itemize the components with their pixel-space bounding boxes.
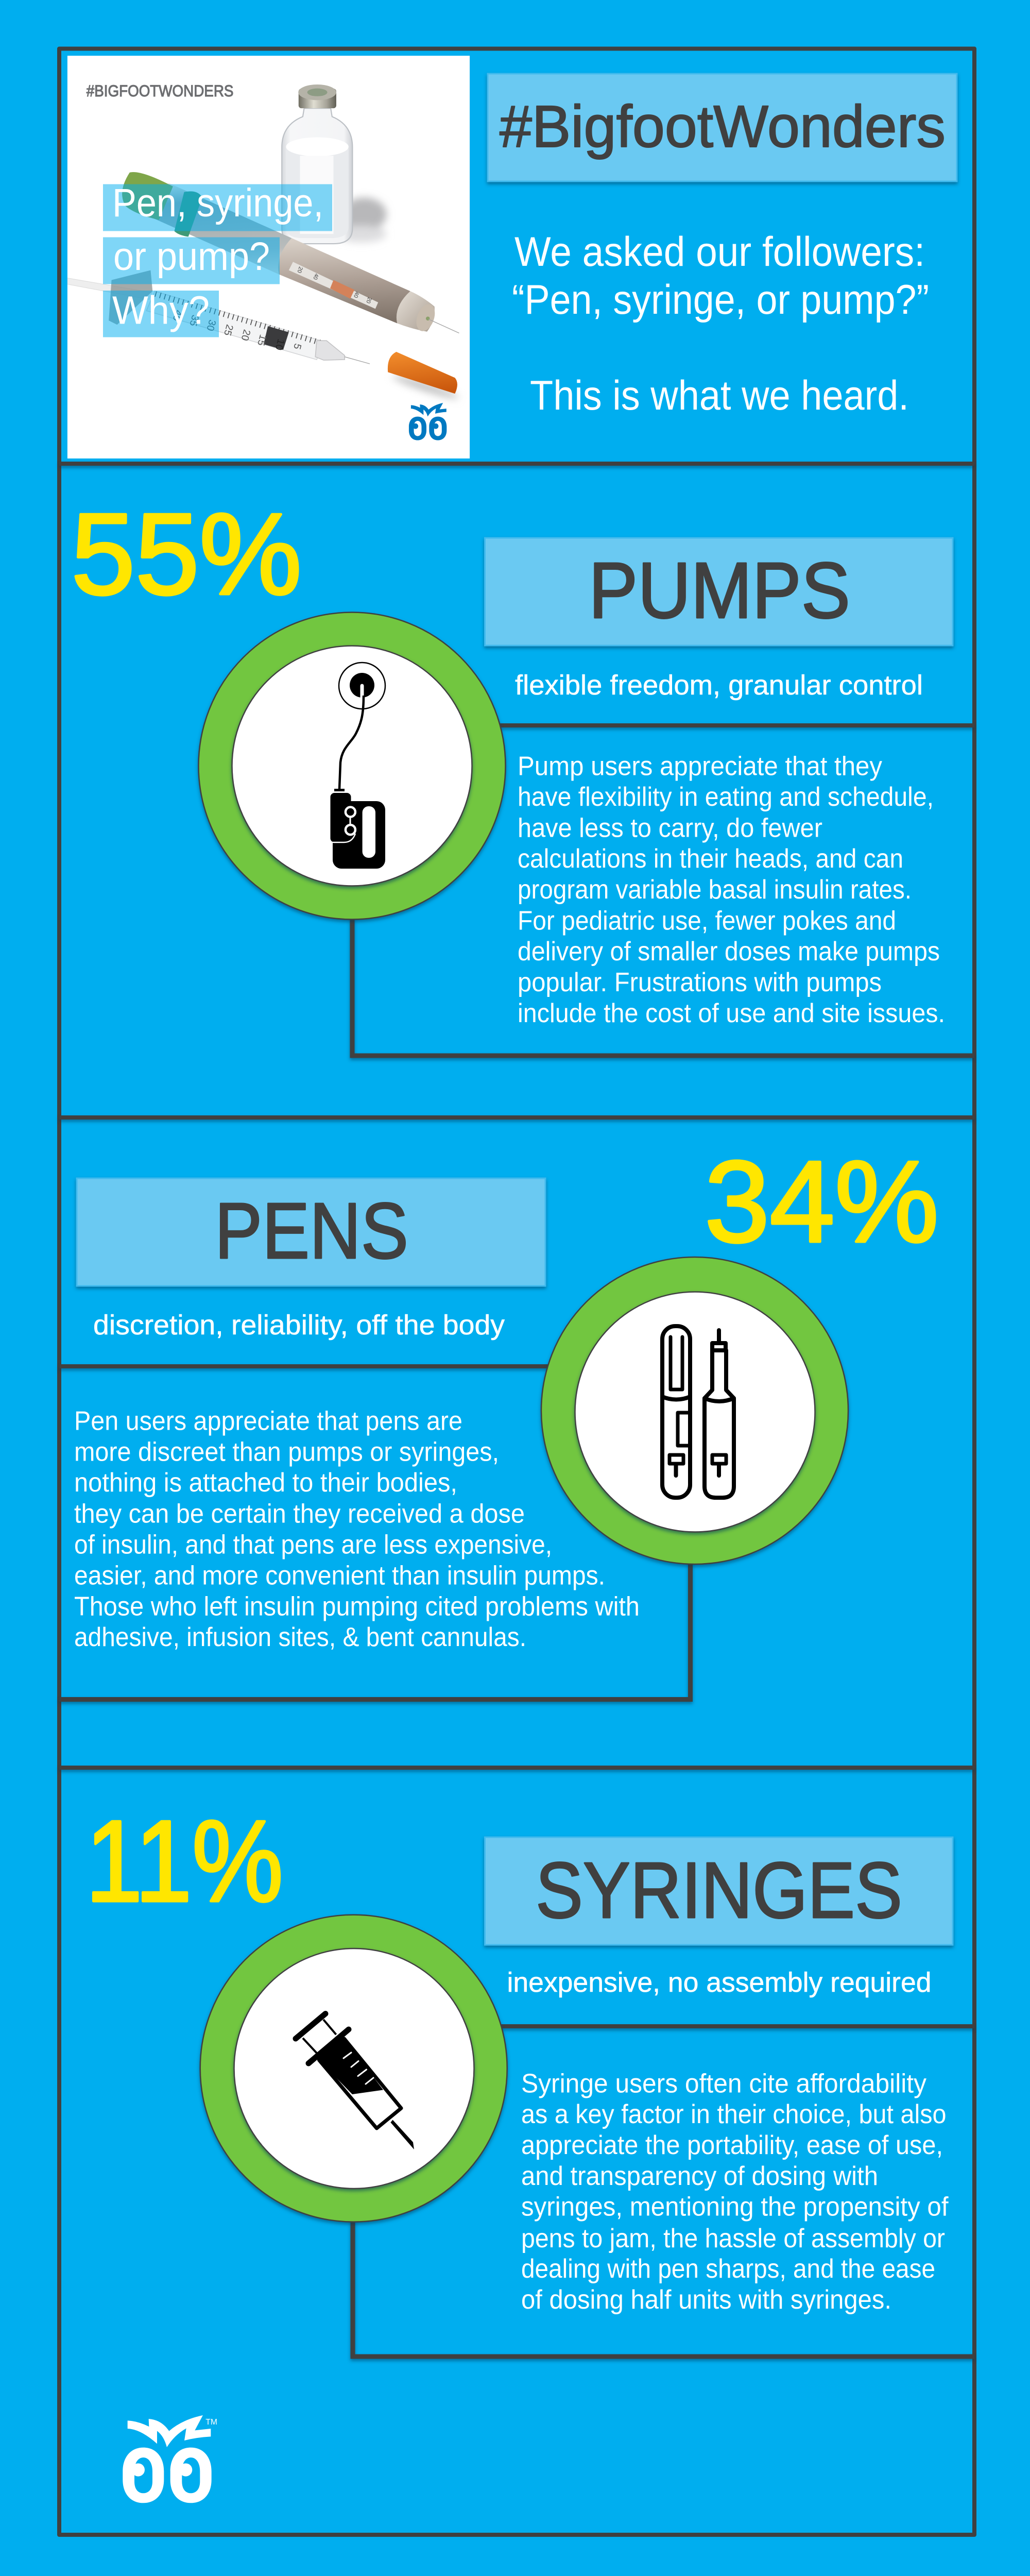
syringe: 30 (204, 318, 218, 332)
pumps paragraph: have flexibility in eating and schedule, (518, 782, 934, 812)
insulin pen (122, 172, 459, 334)
syringes paragraph: pens to jam, the hassle of assembly or (521, 2224, 945, 2253)
panel: pens (59, 1137, 939, 1699)
pens paragraph: Pen users appreciate that pens are (74, 1406, 462, 1436)
pumps paragraph: Pump users appreciate that they (518, 751, 882, 781)
intro text (512, 229, 929, 419)
syringes paragraph: as a key factor in their choice, but also (521, 2099, 947, 2129)
pumps paragraph: delivery of smaller doses make pumps (518, 937, 940, 967)
syringes circle (200, 1915, 507, 2222)
pens paragraph: more discreet than pumps or syringes, (74, 1437, 499, 1467)
pens paragraph: Those who left insulin pumping cited problems with (74, 1592, 640, 1622)
syringes percent: 11% (85, 1796, 283, 1926)
logo: white mark footer: TM (205, 2418, 217, 2427)
insulin pen: 40 (312, 273, 320, 280)
pumps heading box (485, 538, 953, 646)
syringe: 25 (221, 323, 235, 337)
pumps connector lines (352, 723, 974, 1056)
orange needle cap (388, 352, 460, 401)
logo: blue mark on photo (409, 403, 447, 440)
syringes connector lines (353, 2024, 974, 2357)
pens connector lines (59, 1364, 690, 1699)
photo overlay: question (103, 181, 332, 337)
pens paragraph (74, 1406, 640, 1652)
pens heading box (77, 1178, 545, 1286)
pens circle (541, 1257, 848, 1564)
syringe: 20 (239, 328, 252, 342)
photo: insulin devices (67, 56, 470, 459)
intro text: This is what we heard. (530, 372, 909, 419)
pumps paragraph: include the cost of use and site issues. (518, 998, 945, 1028)
pens paragraph: nothing is attached to their bodies, (74, 1468, 457, 1498)
pumps heading box: PUMPS (589, 546, 850, 635)
pens paragraph: adhesive, infusion sites, & bent cannulas. (74, 1622, 526, 1652)
syringes paragraph: appreciate the portability, ease of use, (521, 2130, 943, 2160)
vial (282, 84, 387, 244)
insulin pen: 40 (352, 291, 360, 299)
pumps paragraph: calculations in their heads, and can (518, 844, 903, 874)
title box (488, 74, 957, 181)
pens tagline: discretion, reliability, off the body (93, 1310, 505, 1341)
pumps paragraph: have less to carry, do fewer (518, 813, 822, 843)
logo: white mark footer (123, 2415, 217, 2503)
syringes paragraph: Syringe users often cite affordability (521, 2069, 926, 2099)
pumps paragraph: popular. Frustrations with pumps (518, 968, 882, 997)
intro text: We asked our followers: (514, 229, 925, 275)
intro text: “Pen, syringe, or pump?” (512, 277, 929, 323)
title box: #BigfootWonders (500, 94, 946, 160)
pens heading box: PENS (215, 1187, 408, 1275)
pens paragraph: they can be certain they received a dose (74, 1499, 525, 1529)
panel: header (67, 56, 957, 459)
pens percent: 34% (705, 1137, 939, 1266)
syringes paragraph (521, 2069, 949, 2315)
syringe: 35 (187, 314, 201, 328)
syringe: 10 (273, 338, 287, 351)
photo overlay: question: Why? (112, 289, 210, 333)
pumps circle (199, 612, 506, 919)
pumps percent: 55% (71, 489, 302, 619)
pumps paragraph: program variable basal insulin rates. (518, 875, 912, 905)
panel: pumps (71, 489, 974, 1056)
syringes paragraph: dealing with pen sharps, and the ease (521, 2254, 935, 2284)
syringe (67, 270, 370, 364)
insulin pen: 20 (296, 266, 304, 274)
insulin pen: 20 (365, 296, 373, 304)
syringes paragraph: syringes, mentioning the propensity of (521, 2192, 949, 2222)
syringe: 15 (255, 333, 269, 347)
pens paragraph: of insulin, and that pens are less expensive, (74, 1530, 552, 1560)
pumps tagline: flexible freedom, granular control (515, 670, 923, 701)
pumps paragraph (518, 751, 945, 1028)
photo overlay: question: Pen, syringe, (112, 181, 323, 225)
icon: syringe (296, 2013, 414, 2149)
pumps paragraph: For pediatric use, fewer pokes and (518, 906, 896, 936)
syringes paragraph: of dosing half units with syringes. (521, 2285, 891, 2315)
syringes paragraph: and transparency of dosing with (521, 2161, 878, 2191)
syringe: 5 (291, 342, 303, 350)
icon: insulin pump (330, 663, 385, 869)
syringes tagline: inexpensive, no assembly required (507, 1967, 931, 1998)
panel: syringes (85, 1796, 974, 2357)
icon: insulin pens (662, 1326, 734, 1498)
pens paragraph: easier, and more convenient than insulin pumps. (74, 1561, 605, 1591)
syringes heading box: SYRINGES (536, 1846, 902, 1935)
photo overlay: question: or pump? (113, 234, 270, 279)
syringe: 40 (170, 309, 184, 323)
photo caption tag: #BIGFOOTWONDERS (87, 82, 233, 100)
